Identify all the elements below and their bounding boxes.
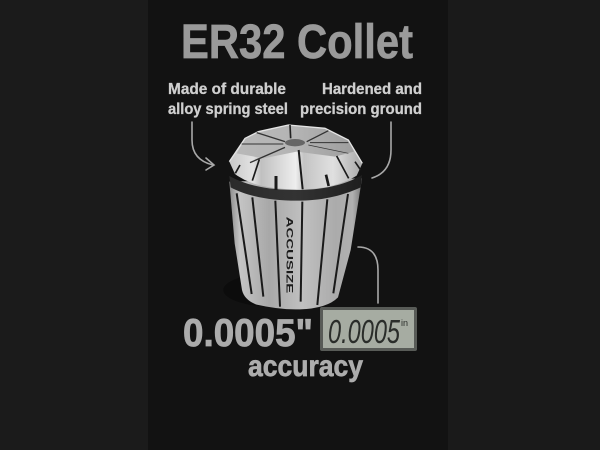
collet head top	[237, 125, 354, 158]
callout: finish: precision ground	[300, 101, 422, 118]
callout: material: Made of durable	[168, 81, 286, 98]
right side band	[448, 0, 600, 450]
callout: finish: Hardened and	[322, 81, 422, 98]
black groove	[229, 175, 362, 201]
left side band	[0, 0, 148, 450]
centre bore	[285, 139, 305, 146]
accuracy label: accuracy	[248, 350, 363, 383]
accuracy value: 0.0005"	[183, 312, 313, 355]
digital display: in	[401, 318, 408, 328]
arrow: finish to collet	[372, 122, 391, 178]
collet head side	[229, 125, 362, 189]
head slots	[235, 150, 361, 190]
callout: material	[168, 81, 288, 118]
collet shadow	[223, 273, 323, 307]
collet body	[229, 178, 362, 309]
title: ER32 Collet	[181, 16, 413, 69]
collet	[223, 125, 362, 309]
digital display: 0.0005	[328, 313, 400, 350]
leader line: collet to display	[358, 247, 378, 303]
digital display	[320, 307, 417, 351]
body slots	[237, 193, 348, 307]
brand label: ACCUSIZE	[284, 217, 294, 293]
arrow: material to collet	[192, 122, 214, 170]
top slots	[242, 125, 348, 163]
callout: material: alloy spring steel	[168, 101, 288, 118]
head rim highlight	[229, 125, 362, 163]
callout: finish	[300, 81, 422, 118]
